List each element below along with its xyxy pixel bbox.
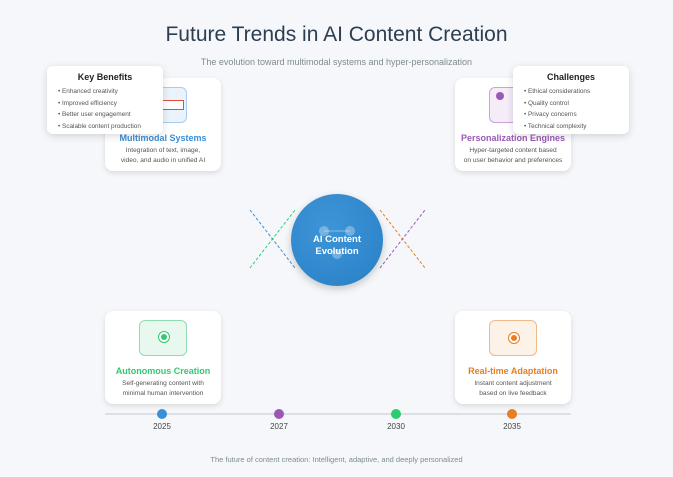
- callout: key benefits: • Scalable content production: [58, 122, 141, 130]
- card: autonomous: [105, 311, 221, 404]
- card: autonomous: Self-generating content with: [122, 380, 204, 387]
- timeline: 2035: [503, 422, 521, 431]
- card: realtime: based on live feedback: [479, 390, 547, 397]
- callout: challenges: • Technical complexity: [524, 122, 587, 130]
- timeline: 2030: [387, 422, 405, 431]
- icon: realtime: [489, 320, 537, 356]
- subtitle: The evolution toward multimodal systems and hyper-personalization: [201, 57, 472, 67]
- callout: challenges: • Quality control: [524, 100, 569, 106]
- footer: The future of content creation: Intelligent, adaptive, and deeply personalized: [210, 455, 463, 464]
- callout: key benefits: Key Benefits: [78, 72, 132, 82]
- card: personalization: Personalization Engines: [461, 133, 565, 143]
- title: Future Trends in AI Content Creation: [165, 23, 508, 46]
- timeline: 2027: [270, 422, 288, 431]
- center circle: [291, 194, 383, 286]
- card: realtime: Real-time Adaptation: [468, 366, 558, 376]
- card: multimodal: Integration of text, image,: [126, 147, 200, 154]
- card: multimodal: [105, 78, 221, 171]
- callout: key benefits: • Improved efficiency: [58, 100, 117, 106]
- icon: personalization: [489, 87, 537, 123]
- callout: key benefits: [47, 66, 163, 134]
- card: personalization: on user behavior and preferences: [464, 157, 562, 164]
- center circle: Evolution: [315, 246, 359, 257]
- callout: key benefits: • Better user engagement: [58, 111, 131, 118]
- callout: challenges: [513, 66, 629, 134]
- icon: multimodal: [139, 87, 187, 123]
- callout: key benefits: • Enhanced creativity: [58, 88, 118, 95]
- card: multimodal: video, and audio in unified AI: [121, 157, 205, 164]
- timeline: 2025: [153, 422, 171, 431]
- card: personalization: Hyper-targeted content based: [469, 147, 557, 154]
- callout: challenges: • Ethical considerations: [524, 88, 590, 95]
- card: personalization: [455, 78, 571, 171]
- card: realtime: [455, 311, 571, 404]
- card: autonomous: Autonomous Creation: [116, 366, 210, 376]
- callout: challenges: • Privacy concerns: [524, 111, 577, 118]
- card: multimodal: Multimodal Systems: [119, 133, 207, 143]
- icon: autonomous: [139, 320, 187, 356]
- center circle: AI Content: [313, 234, 361, 245]
- callout: challenges: Challenges: [547, 72, 595, 82]
- card: autonomous: minimal human intervention: [123, 390, 203, 397]
- card: realtime: Instant content adjustment: [474, 380, 552, 387]
